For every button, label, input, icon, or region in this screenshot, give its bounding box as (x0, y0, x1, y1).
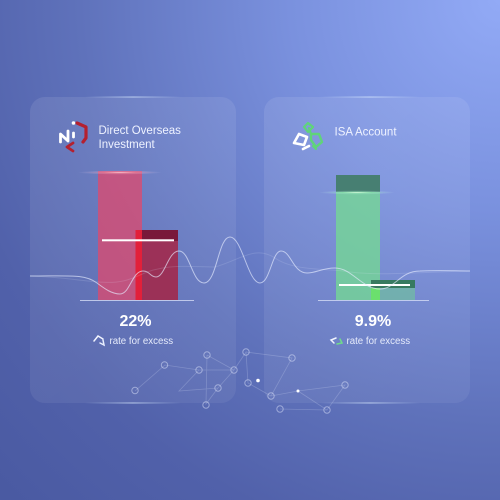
bar overlap (136, 230, 142, 300)
panel: direct overseas investment: Investment (98, 139, 156, 151)
bar: large green (336, 192, 380, 300)
baseline (80, 300, 194, 301)
glow on bar top (319, 190, 395, 194)
threshold line (102, 239, 174, 241)
card bottom highlight (320, 402, 420, 404)
title: direct overseas investment: Direct Overseas (98, 125, 181, 137)
bar cap dark green (336, 175, 380, 192)
threshold line (339, 284, 410, 286)
icon: small logo (94, 336, 104, 345)
bar overlap (371, 288, 380, 300)
title: isa account: ISA Account (334, 126, 397, 138)
icon: small logo (331, 338, 342, 344)
glowing node (256, 379, 260, 382)
value: 9.9%: 9.9% (355, 313, 391, 330)
panel: direct overseas investment (30, 96, 236, 404)
baseline (318, 300, 429, 301)
card top highlight (320, 96, 420, 98)
bar cap dark (142, 230, 178, 241)
bar: large red (98, 171, 142, 300)
glowing node (296, 390, 300, 392)
wave line chart (30, 237, 470, 294)
value: 22%: 22% (119, 313, 152, 330)
small bar cap (371, 280, 415, 288)
panel: isa account (264, 96, 470, 404)
card bottom highlight (85, 402, 181, 404)
caption: rate for excess: rate for excess (110, 336, 173, 347)
icon: red and white logo (60, 121, 86, 151)
caption: rate for excess: rate for excess (346, 336, 410, 347)
bar: small green (371, 280, 415, 300)
network diagram (132, 349, 348, 413)
bar: small dark red (136, 230, 178, 300)
card top highlight (85, 96, 181, 98)
glow on bar top (78, 170, 162, 174)
icon: green and white logo (294, 123, 322, 149)
